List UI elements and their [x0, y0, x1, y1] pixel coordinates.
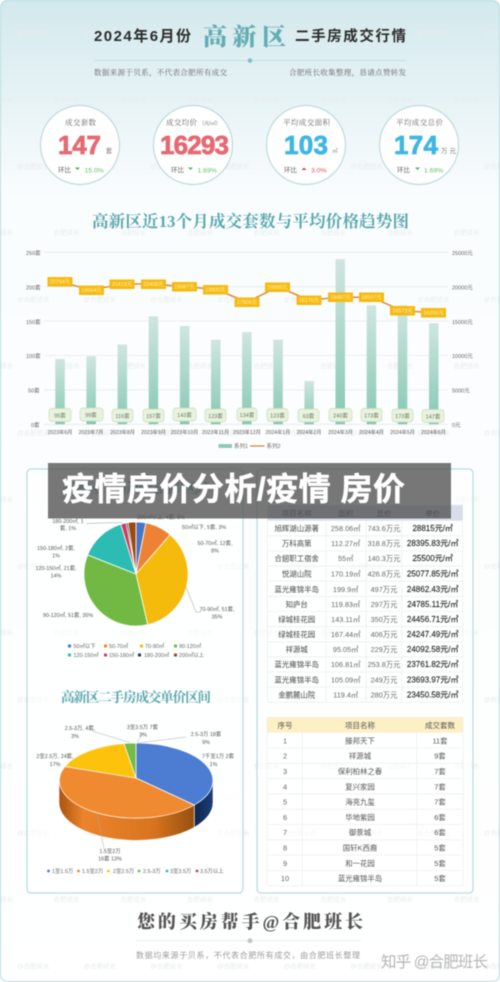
header divider — [94, 58, 406, 63]
KPI: transaction count: 147 — [58, 130, 101, 160]
bar value tags — [49, 408, 444, 422]
table header: 项目名称 — [282, 508, 312, 519]
project names: 合翅职工宿舍 — [275, 554, 319, 563]
table header: 序号 — [278, 720, 292, 731]
unit prices: 23761.82元/㎡ — [407, 660, 458, 669]
rank numbers: 6 — [283, 813, 287, 822]
left axis labels: 100套 — [26, 352, 41, 360]
KPI: average total price: 环比 — [397, 165, 410, 174]
transaction counts — [432, 736, 448, 883]
bar value tags: 240套 — [333, 412, 348, 420]
areas: 143.11㎡ — [331, 615, 361, 624]
pie labels: 120-150㎡, 21套, — [35, 564, 77, 572]
3D pie labels: 7千至1万 2套 — [202, 752, 235, 760]
project names: 国轩K西裔 — [343, 844, 378, 852]
bars — [55, 259, 439, 424]
transaction counts: 7套 — [434, 798, 446, 807]
project names: 海亮九玺 — [345, 798, 375, 807]
transaction counts: 5套 — [434, 844, 446, 852]
unit prices: 24456.71元/㎡ — [407, 615, 458, 624]
KPI: average total price: 174 — [394, 130, 439, 160]
3D pie labels: 2.5-3万 18套 — [191, 730, 222, 738]
table header: 项目名称 — [345, 720, 375, 731]
3D pie legend: 3.5万以上 — [200, 867, 224, 875]
totals: 743.6万元 — [368, 524, 400, 533]
pie labels: 200㎡以上, 4套, 3% — [137, 513, 185, 521]
header title — [94, 23, 406, 51]
price labels: 20419元 — [112, 281, 133, 288]
3D pie labels: 1% — [210, 762, 218, 768]
x axis labels: 2024年6月 — [421, 428, 446, 436]
right axis labels: 5000元 — [452, 388, 470, 394]
totals — [368, 524, 400, 700]
chart legend — [218, 442, 281, 450]
zhihu watermark: 知乎 @合肥班长 — [381, 953, 488, 971]
areas: 167.44㎡ — [331, 630, 361, 639]
project names: 御景城 — [349, 828, 372, 837]
panel: right tables — [257, 469, 473, 893]
transaction counts: 9套 — [434, 752, 446, 761]
totals: 406万元 — [371, 630, 397, 639]
price line — [60, 282, 434, 313]
pie legend: 70-90㎡ — [145, 642, 165, 650]
pie labels: 35% — [212, 614, 223, 620]
price labels: 20408元 — [143, 281, 164, 288]
rank numbers: 3 — [283, 767, 287, 776]
totals: 318.8万元 — [368, 539, 400, 548]
table header: 成交套数 — [425, 720, 455, 731]
3D pie legend: 2至2.5万 — [113, 868, 135, 875]
header title: 高新区 — [203, 23, 286, 51]
totals: 280万元 — [371, 690, 397, 700]
project names: 滕邦天下 — [345, 736, 375, 745]
table: highest unit prices — [267, 505, 463, 702]
pie leader lines — [86, 522, 201, 612]
KPI: average total price — [380, 106, 458, 184]
project names: 蓝光雍锦半岛 — [338, 874, 382, 883]
unit prices: 28815元/㎡ — [412, 524, 453, 533]
rank numbers: 2 — [283, 752, 287, 761]
3D pie legend — [47, 867, 224, 875]
x axis labels: 2024年1月 — [266, 428, 290, 436]
transaction counts: 5套 — [434, 874, 446, 883]
x axis labels: 2023年12月 — [233, 428, 261, 436]
price labels: 17806元 — [237, 299, 258, 306]
header notes: 数据来源于贝系，不代表合肥所有成交 — [94, 67, 228, 78]
3D pie labels: 2至2.5万, 24套, — [36, 752, 74, 760]
KPI: average area: 平均成交面积 — [283, 117, 330, 127]
right axis labels: 25000元 — [452, 250, 473, 257]
x axis labels: 2023年6月 — [48, 428, 72, 436]
project names: 旭辉湖山源著 — [275, 524, 319, 533]
totals: 229万元 — [371, 645, 397, 654]
pie legend: 150-180㎡ — [109, 651, 135, 659]
KPI: average price: 环比 — [171, 165, 184, 174]
3D pie labels — [36, 723, 235, 862]
price labels: 19800元 — [205, 287, 226, 294]
footer note: 数据均来源于贝系，不代表合肥所有成交，由合肥班长整理 — [136, 950, 360, 960]
left axis labels: 0套 — [31, 421, 40, 429]
bar value tags: 63套 — [303, 412, 315, 420]
totals: 253.8万元 — [368, 660, 400, 669]
footer slogan: 您的买房帮手@合肥班长 — [137, 911, 363, 932]
x axis labels: 2024年2月 — [297, 428, 321, 436]
project names: 保利柏林之春 — [338, 767, 383, 776]
totals: 350万元 — [371, 615, 397, 624]
unit prices: 23450.58元/㎡ — [407, 690, 458, 700]
header title: 二手房成交行情 — [295, 27, 406, 45]
rank numbers: 5 — [283, 798, 287, 807]
table header — [278, 720, 455, 731]
project names: 绿城桂花园 — [278, 615, 315, 624]
overlay banner — [48, 463, 451, 518]
left axis labels — [26, 249, 41, 429]
price labels: 16293元 — [423, 310, 444, 317]
3D pie legend: 1至1.5万 — [52, 868, 74, 875]
pie labels: 180-200㎡, 1 — [52, 517, 84, 525]
price labels: 19564元 — [81, 287, 102, 294]
x axis labels: 2024年5月 — [390, 428, 415, 436]
transaction counts: 6套 — [434, 813, 446, 822]
price labels: 18507元 — [361, 294, 382, 301]
bar value tags: 116套 — [115, 412, 130, 420]
x axis labels: 2023年7月 — [79, 428, 103, 436]
x axis labels: 2024年4月 — [359, 428, 384, 436]
right axis labels: 0元 — [452, 422, 461, 429]
bar value tags: 134套 — [240, 411, 255, 419]
transaction counts: 7套 — [434, 782, 446, 791]
table header: 单价 — [425, 508, 441, 519]
unit price section title: 高新区二手房成交单价区间 — [61, 689, 211, 705]
KPI: transaction count: 15.0% — [84, 168, 104, 174]
header title: 2024年6月份 — [94, 27, 191, 45]
transaction counts: 6套 — [434, 828, 446, 837]
footer divider — [136, 938, 361, 943]
price labels: 20794元 — [50, 279, 71, 286]
x axis labels: 2023年11月 — [202, 428, 229, 436]
areas: 119.83㎡ — [331, 600, 361, 609]
KPI: average area: 103 — [284, 130, 328, 160]
pie legend: 120-150㎡ — [74, 651, 99, 659]
project names — [275, 524, 319, 700]
KPI: average price: 成交均价 — [166, 117, 198, 127]
project names: 祥源城 — [286, 645, 308, 654]
pie legend: 50㎡以下 — [74, 642, 96, 650]
bar value tags: 99套 — [85, 411, 97, 419]
3D pie labels: 16套 13% — [98, 854, 122, 862]
transaction counts: 11套 — [432, 736, 448, 745]
3D pie labels: 9% — [202, 740, 210, 746]
chart legend: 系列2 — [266, 442, 281, 450]
pie legend — [68, 642, 205, 659]
pie labels: 50㎡以下, 5套, 3% — [182, 523, 226, 531]
right axis labels: 15000元 — [452, 319, 473, 326]
price labels: 18176元 — [299, 297, 320, 304]
areas: 55㎡ — [338, 554, 354, 563]
table header — [282, 508, 441, 519]
areas: 258.06㎡ — [331, 524, 361, 533]
KPI: average area: 环比 — [284, 165, 298, 174]
3D pie leader lines — [92, 731, 186, 849]
3D pie legend: 1.5至2万 — [82, 868, 104, 875]
table: top projects by transactions — [267, 717, 463, 886]
bar value tags: 147套 — [426, 412, 441, 420]
bar value tags: 123套 — [270, 412, 285, 420]
unit prices: 23693.97元/㎡ — [407, 676, 458, 684]
x axis labels: 2023年9月 — [141, 428, 166, 436]
pie legend: 50-70㎡ — [109, 642, 129, 650]
3D pie legend: 2.5-3万 — [143, 868, 161, 875]
3D pie labels: 2.5-3万, 4套, — [65, 724, 96, 732]
unit prices: 24785.11元/㎡ — [407, 600, 458, 609]
rank numbers: 4 — [283, 782, 287, 791]
areas: 119.4㎡ — [333, 690, 359, 700]
rank numbers: 8 — [283, 844, 287, 852]
left axis labels: 150套 — [26, 318, 41, 326]
KPI: average price: 16293 — [160, 130, 229, 160]
KPI: average price — [154, 106, 232, 184]
table header: 面积 — [338, 508, 354, 519]
left axis labels: 250套 — [26, 249, 41, 257]
rank numbers: 1 — [283, 736, 287, 745]
totals: 140.3万元 — [368, 554, 400, 563]
project names: 蓝光雍锦半岛 — [275, 660, 319, 669]
unit prices: 25500元/㎡ — [412, 554, 453, 563]
project names: 万科高第 — [282, 539, 311, 548]
areas: 199.9㎡ — [333, 585, 359, 594]
pie labels: 150-180㎡, 2套, — [37, 544, 76, 552]
unit prices: 24247.49元/㎡ — [407, 630, 458, 639]
KPI: average area: 3.0% — [311, 168, 326, 174]
combo chart: transactions and price — [26, 249, 473, 450]
x axis labels: 2023年10月 — [171, 428, 198, 436]
project names: 华地紫园 — [345, 813, 375, 822]
KPI: transaction count: 成交套数 — [65, 117, 96, 127]
pie labels: 套, 1% — [60, 524, 76, 532]
3D pie labels: 17% — [50, 762, 61, 768]
pie legend: 200㎡以上 — [179, 651, 205, 659]
KPI: average price: （元/㎡） — [199, 119, 221, 127]
KPI: average total price: 1.69% — [424, 168, 443, 174]
areas: 106.81㎡ — [331, 660, 361, 669]
pie labels — [35, 513, 235, 620]
project names: 和一花园 — [345, 859, 375, 868]
KPI: average price: 1.69% — [198, 168, 217, 174]
left axis labels: 200套 — [26, 284, 41, 292]
unit prices: 28395.83元/㎡ — [407, 539, 458, 548]
unit prices: 24862.43元/㎡ — [407, 585, 458, 594]
project names: 复兴家园 — [345, 782, 375, 791]
x axis labels — [48, 428, 446, 436]
right axis labels: 10000元 — [452, 353, 473, 360]
project names — [338, 736, 383, 883]
KPI: transaction count — [40, 106, 120, 184]
project names: 祥源城 — [349, 752, 372, 761]
pie labels: 1% — [52, 554, 60, 560]
pie labels: 8% — [211, 548, 219, 554]
rank numbers: 9 — [283, 859, 287, 868]
x axis labels: 2024年3月 — [328, 428, 353, 436]
3D pie chart: unit price ranges — [36, 723, 235, 875]
price labels: 18487元 — [330, 294, 351, 301]
areas: 105.09㎡ — [331, 676, 361, 684]
price labels: 19987元 — [174, 284, 195, 291]
area section title: 高新区二手房成交面积区间 — [62, 480, 208, 497]
3D pie labels: 3% — [71, 734, 79, 740]
bar value tags: 173套 — [364, 412, 379, 420]
project names: 悦湖山院 — [282, 570, 312, 578]
KPI: transaction count: 环比 — [58, 165, 72, 174]
areas — [331, 524, 361, 700]
price labels: 19999元 — [267, 284, 288, 291]
transaction counts: 5套 — [434, 859, 446, 868]
pie labels: 14% — [51, 574, 62, 580]
header notes — [94, 67, 406, 78]
totals: 297万元 — [371, 600, 397, 609]
totals: 426.8万元 — [368, 570, 400, 578]
bar value tags: 173套 — [395, 412, 410, 420]
project names: 金鹏麓山院 — [278, 690, 316, 700]
3D pie labels: 1.5至2万 — [99, 848, 121, 855]
chart title: 高新区近13个月成交套数与平均价格趋势图 — [92, 211, 409, 231]
left axis labels: 50套 — [28, 386, 40, 394]
rank numbers — [281, 736, 289, 883]
bar value tags: 157套 — [146, 412, 161, 420]
x axis labels: 2023年8月 — [110, 428, 135, 436]
right axis labels — [452, 250, 473, 429]
pie labels: 50-70㎡, 12套, — [197, 539, 233, 547]
project names: 蓝光雍锦半岛 — [275, 676, 319, 684]
overlay banner: 疫情房价分析/疫情 房价 — [62, 471, 405, 507]
price labels: 16573元 — [392, 308, 413, 315]
pie legend: 180-200㎡ — [144, 651, 170, 659]
totals: 249万元 — [371, 676, 397, 684]
KPI cards — [40, 106, 458, 184]
project names: 知庐台 — [286, 600, 308, 609]
KPI: average area: ㎡ — [332, 147, 338, 155]
pie labels: 70-90㎡, 51套, — [199, 605, 235, 613]
table header: 总价 — [376, 508, 392, 519]
KPI: average total price: 万元 — [441, 147, 456, 155]
KPI: transaction count: 套 — [106, 146, 113, 155]
rank numbers: 10 — [281, 874, 289, 883]
unit prices: 24092.58元/㎡ — [407, 645, 458, 654]
3D pie labels: 3至3.5万 7套 — [127, 723, 159, 731]
pie chart: area ranges — [35, 513, 235, 659]
right axis labels: 20000元 — [452, 284, 473, 292]
price labels — [48, 277, 446, 318]
totals: 497万元 — [371, 585, 397, 594]
3D pie legend: 3至3.5万 — [170, 868, 192, 875]
bar value tags: 95套 — [54, 412, 66, 420]
transaction counts: 7套 — [434, 767, 446, 776]
areas: 95.05㎡ — [333, 645, 359, 654]
unit prices: 25077.85元/㎡ — [407, 570, 458, 578]
rank numbers: 7 — [283, 828, 287, 837]
bar value tags: 143套 — [177, 411, 192, 419]
pie legend: 90-120㎡ — [179, 642, 202, 650]
bar value tags: 123套 — [208, 412, 223, 420]
project names: 绿城桂花园 — [278, 630, 315, 639]
3D pie labels: 3% — [139, 732, 147, 738]
areas: 170.19㎡ — [331, 570, 361, 578]
KPI: average area — [266, 106, 346, 184]
unit prices — [407, 524, 458, 700]
pie labels: 90-120㎡, 51套, 35% — [43, 611, 93, 619]
KPI: average total price: 平均成交总价 — [396, 117, 444, 127]
panel: left charts — [27, 469, 243, 893]
header notes: 合肥班长收集整理，恳请点赞转发 — [289, 67, 406, 78]
chart legend: 系列1 — [234, 442, 248, 450]
areas: 112.27㎡ — [331, 539, 361, 548]
project names: 蓝光雍锦半岛 — [275, 585, 319, 594]
